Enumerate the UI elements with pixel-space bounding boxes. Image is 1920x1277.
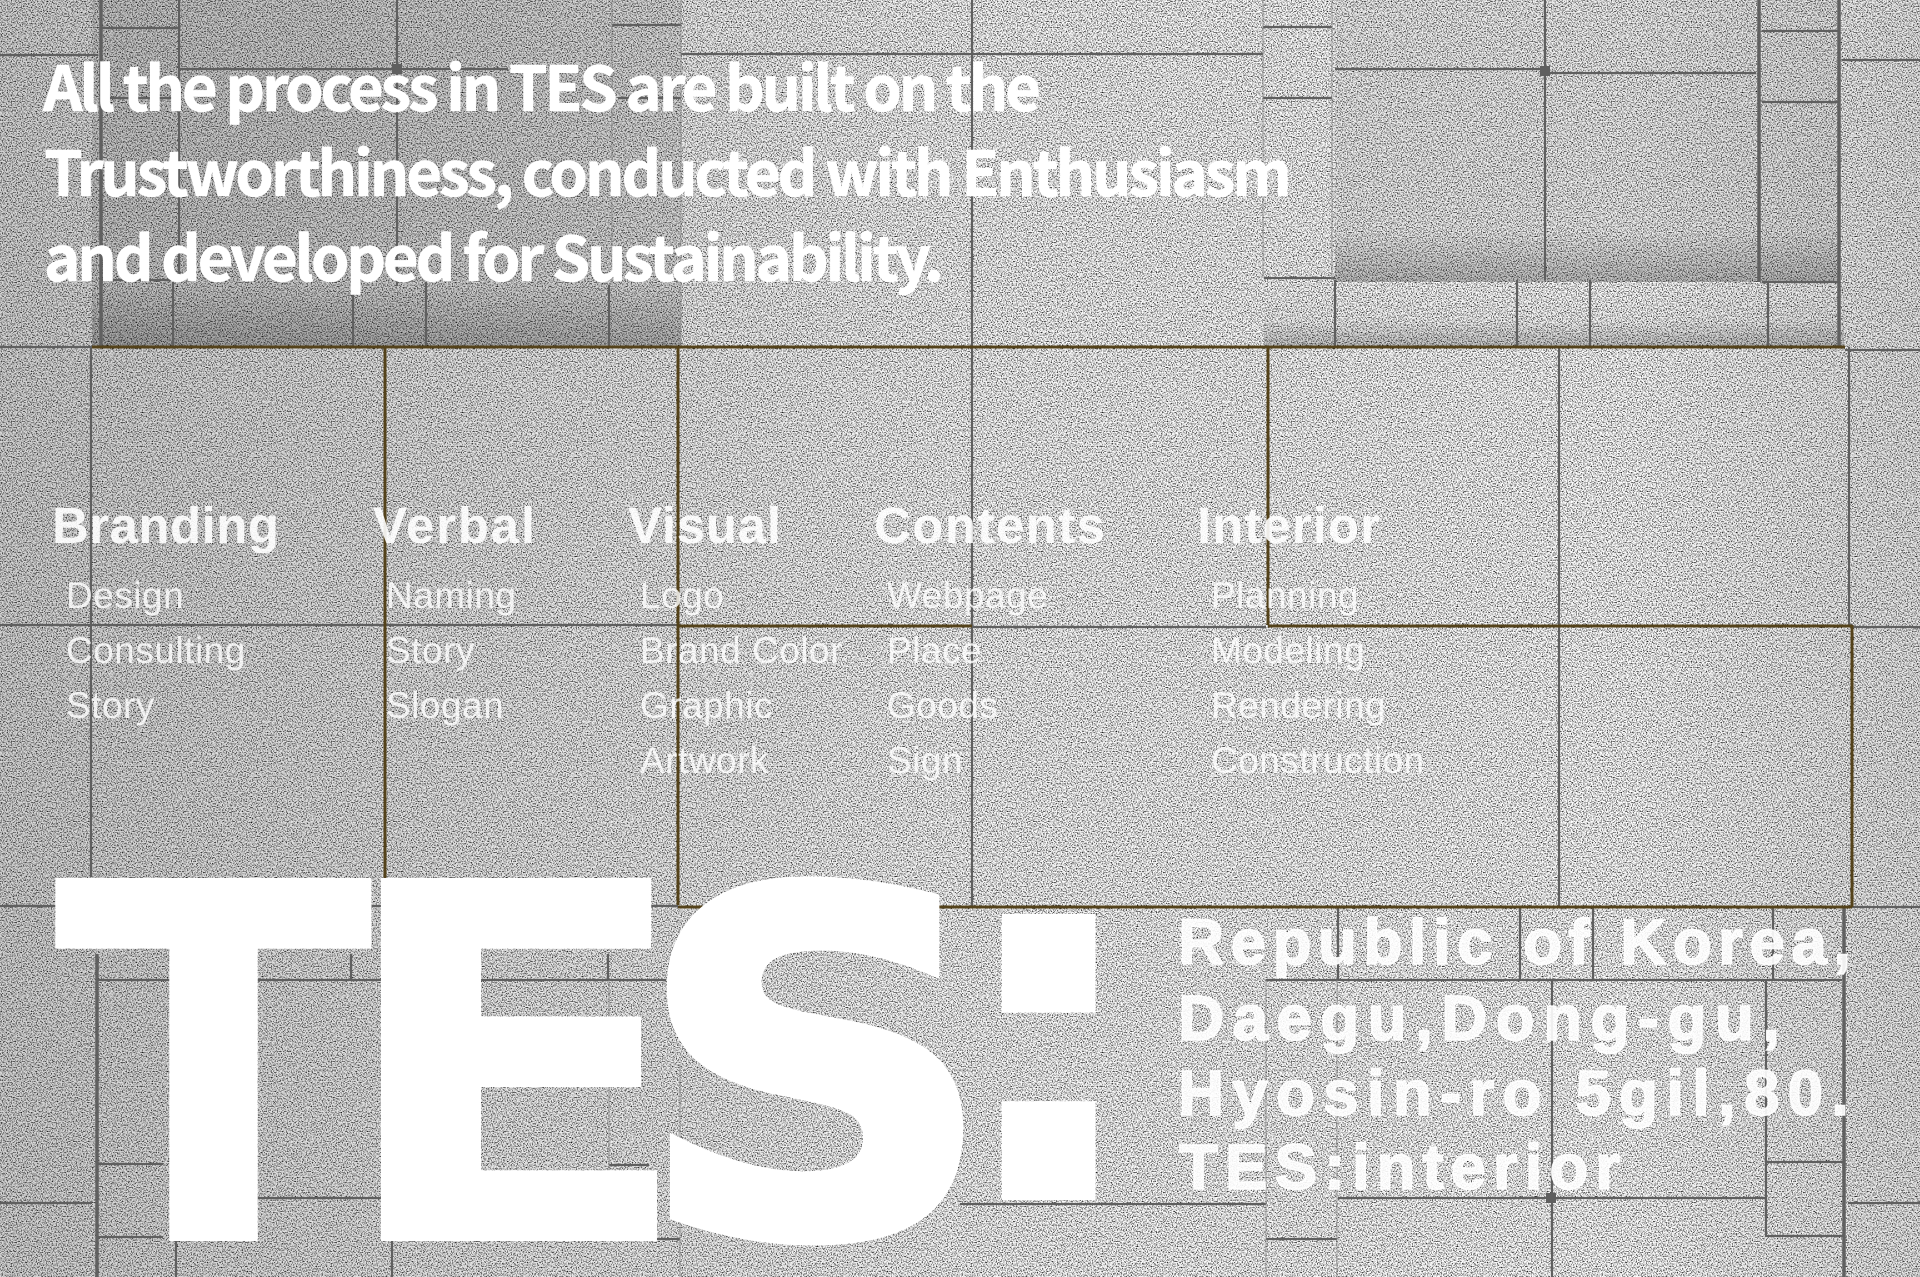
heading: company statement: All the process in TES are built on the [42, 39, 1041, 129]
service column: Interior: Interior [1197, 497, 1380, 554]
service column: Visual: Brand Color [640, 630, 843, 671]
service column: Branding: Design [66, 575, 184, 616]
address block: TES:interior [1179, 1131, 1620, 1203]
heading: company statement: Trustworthiness, conducted with Enthusiasm [44, 124, 1292, 214]
service column: Contents: Contents [874, 497, 1105, 554]
service column: Verbal: Story [386, 630, 475, 671]
service column: Branding: Story [66, 685, 155, 726]
address block [1178, 906, 1851, 1203]
service column: Branding [52, 497, 279, 726]
heading: company statement: and developed for Sustainability. [44, 209, 944, 299]
service column: Contents: Goods [887, 685, 999, 726]
address block: Daegu,Dong-gu, [1178, 982, 1780, 1054]
service column: Interior: Planning [1211, 575, 1359, 616]
service column: Visual [628, 497, 843, 781]
service column: Visual: Visual [628, 497, 781, 554]
service column: Contents: Place [887, 630, 982, 671]
heading: company statement [42, 39, 1292, 299]
service column: Interior: Rendering [1211, 685, 1386, 726]
service column: Verbal: Verbal [373, 497, 535, 554]
service column: Verbal: Slogan [386, 685, 504, 726]
service column: Verbal: Naming [386, 575, 516, 616]
service column: Visual: Graphic [640, 685, 773, 726]
gold joints: highlighted grid lines [92, 347, 1852, 907]
address block: Hyosin-ro 5gil,80. [1178, 1057, 1849, 1129]
address block: Republic of Korea, [1178, 906, 1851, 978]
service column: Branding: Branding [52, 497, 279, 554]
service column: Visual: Artwork [640, 740, 769, 781]
service column: Interior: Construction [1211, 740, 1425, 781]
service column: Interior [1197, 497, 1425, 781]
service column: Visual: Logo [640, 575, 724, 616]
service column: Branding: Consulting [66, 630, 246, 671]
service column: Verbal [373, 497, 535, 726]
service column: Contents [874, 497, 1105, 781]
service column: Contents: Webpage [887, 575, 1048, 616]
service column: Contents: Sign [887, 740, 963, 781]
service column: Interior: Modeling [1211, 630, 1365, 671]
logo: TES: [53, 870, 1120, 1255]
